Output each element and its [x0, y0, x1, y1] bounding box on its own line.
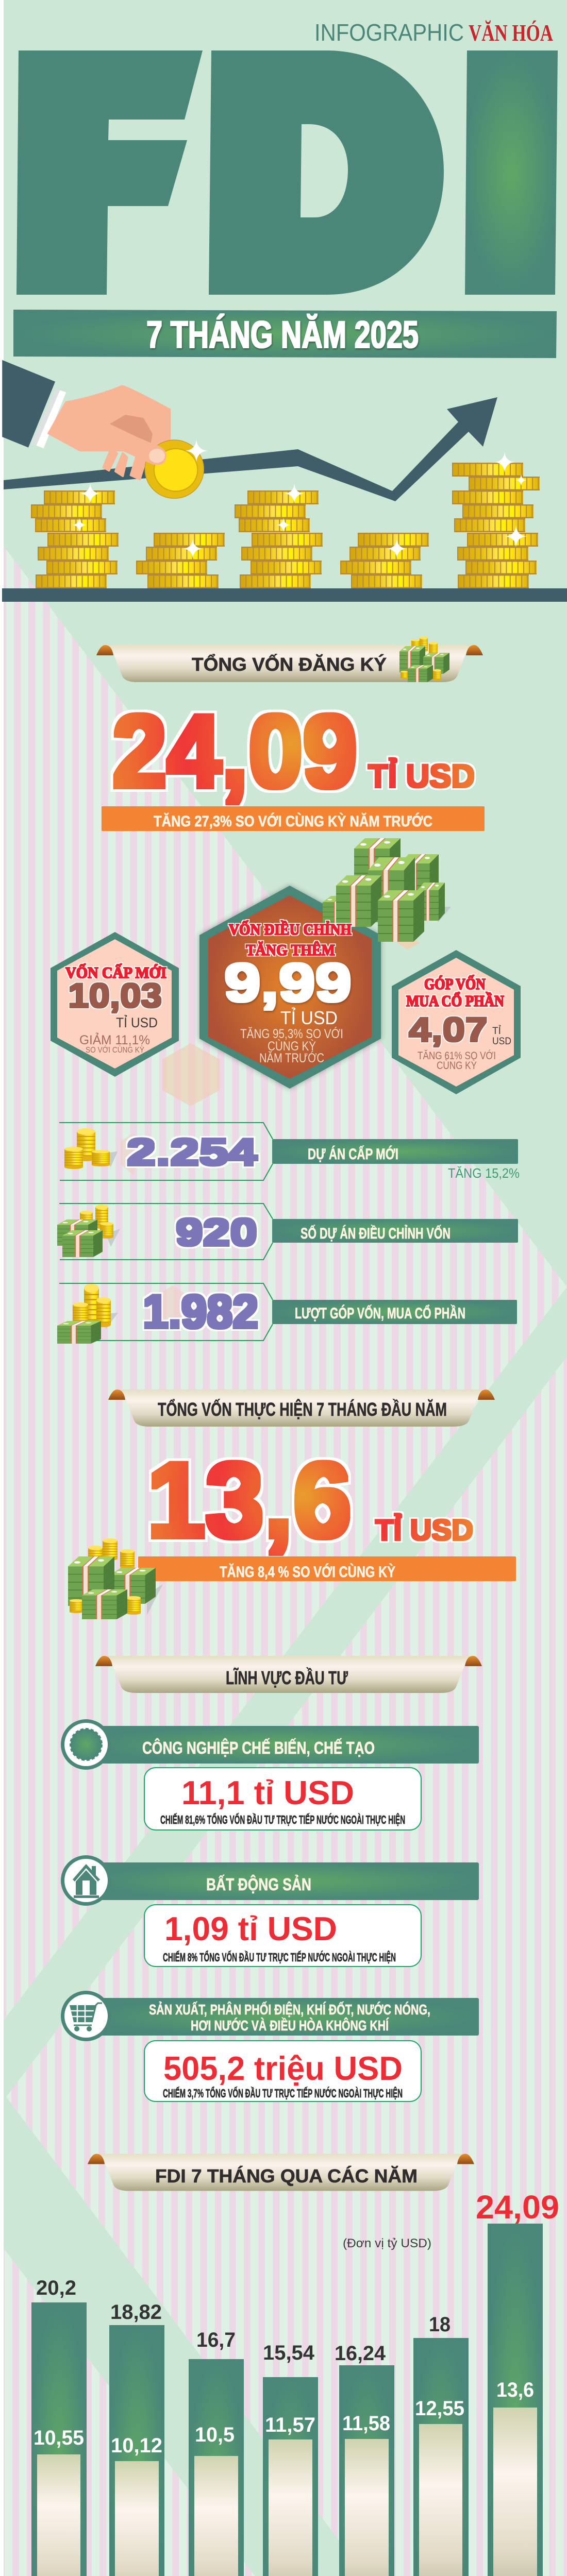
panel: electricity, gas, water: 505,2 triệu USD — [163, 2049, 403, 2087]
icon: rising arrow — [4, 397, 497, 501]
panel: real estate: CHIẾM 8% TỔNG VỐN ĐẦU TƯ TRỰC TIẾP NƯỚC NGOÀI THỰC HIỆN — [163, 1950, 396, 1964]
right hexagon: capital contribution and share purchase: USD — [492, 1036, 511, 1047]
stat row: capital contributions: 1.982 — [143, 1286, 258, 1338]
bar chart: registered and disbursed capital — [31, 2189, 559, 2576]
left hexagon: new capital: 10,03 — [68, 976, 162, 1014]
hero illustration: rising arrow, hand and coin stacks — [2, 360, 567, 602]
icon: money and coins — [399, 636, 449, 682]
panel: processing and manufacturing: CHIẾM 81,6% TỔNG VỐN ĐẦU TƯ TRỰC TIẾP NƯỚC NGOÀI THỰC HIỆN — [160, 1812, 405, 1826]
orange bar: growth 8.4% — [138, 1556, 516, 1581]
unit note: (Đơn vị tỷ USD) — [343, 2236, 431, 2250]
bars 2025: 13,6 — [496, 2379, 534, 2401]
bars 2020: 18,82 — [110, 2301, 162, 2324]
bars 2020 — [109, 2301, 164, 2576]
bars 2023: 11,58 — [342, 2412, 390, 2435]
icon: hand holding coin — [2, 360, 204, 498]
bars 2019 — [31, 2277, 87, 2576]
heading: FDI over the years: FDI 7 THÁNG QUA CÁC NĂM — [155, 2165, 418, 2187]
stat row: capital adjustment projects — [57, 1204, 518, 1260]
left hexagon: new capital: TỈ USD — [116, 1014, 158, 1030]
stat row: capital adjustment projects: 920 — [176, 1212, 257, 1253]
icon: house — [61, 1855, 111, 1906]
ground bar — [2, 588, 567, 602]
left hexagon: new capital: GIẢM 11,1% — [79, 1032, 150, 1047]
sparkles — [72, 439, 527, 558]
heading: total registered capital — [96, 636, 483, 682]
center hexagon text: adjusted capital: TỈ USD — [280, 1007, 338, 1028]
center hexagon text: adjusted capital: 9,99 — [224, 953, 352, 1013]
bars 2020: 10,12 — [111, 2434, 162, 2457]
right hexagon: capital contribution and share purchase: CÙNG KỲ — [437, 1060, 477, 1072]
center hexagon text: adjusted capital — [224, 920, 352, 1065]
bars 2022 — [263, 2342, 318, 2576]
icon: gear badge — [61, 1719, 111, 1770]
icon: money pile — [323, 838, 451, 950]
big number: 13,6 billion USD: 13,6 — [147, 1440, 352, 1560]
bars 2019: 10,55 — [34, 2427, 84, 2449]
bars 2023: 16,24 — [335, 2342, 386, 2365]
coin stack 5 — [452, 463, 540, 588]
icon: coins and bills — [57, 1284, 118, 1344]
center hexagon text: adjusted capital: TĂNG THÊM — [246, 941, 335, 959]
icon: bills and coins — [57, 1205, 120, 1257]
orange bar: growth 27.3% — [102, 806, 485, 831]
left hexagon: new capital: SO VỚI CÙNG KỲ — [86, 1045, 144, 1055]
right hexagon: capital contribution and share purchase: 4,07 — [409, 1010, 488, 1048]
stat row: capital contributions: LƯỢT GÓP VỐN, MUA CỔ PHẦN — [295, 1304, 465, 1322]
bars 2025: 24,09 — [476, 2189, 559, 2226]
panel: real estate: 1,09 tỉ USD — [164, 1910, 337, 1947]
center hexagon base — [199, 886, 381, 1089]
bars 2025 — [476, 2189, 559, 2576]
heading: total disbursed capital: TỔNG VỐN THỰC HIỆN 7 THÁNG ĐẦU NĂM — [158, 1398, 447, 1420]
heading: total disbursed capital — [108, 1389, 495, 1427]
orange bar: growth 27.3%: TĂNG 27,3% SO VỚI CÙNG KỲ NĂM TRƯỚC — [154, 812, 432, 830]
panel: electricity, gas, water: CHIẾM 3,7% TỔNG VỐN ĐẦU TƯ TRỰC TIẾP NƯỚC NGOÀI THỰC HIỆN — [163, 2086, 403, 2100]
panel: processing and manufacturing — [61, 1719, 479, 1830]
heading: FDI over the years — [88, 2154, 474, 2191]
icon: shopping cart — [61, 1991, 111, 2041]
big number: 24,09 billion USD: TỈ USD — [368, 758, 475, 794]
big number: 24,09 billion USD: 24,09 — [112, 694, 357, 809]
right hexagon: capital contribution and share purchase: GÓP VỐN — [424, 974, 486, 993]
coin stack 1 — [31, 490, 119, 588]
orange bar: growth 8.4%: TĂNG 8,4 % SO VỚI CÙNG KỲ — [220, 1563, 395, 1581]
stat row: capital adjustment projects: SỐ DỰ ÁN ĐIỀU CHỈNH VỐN — [301, 1225, 451, 1242]
icon: coin piles — [64, 1128, 118, 1169]
right hexagon: capital contribution and share purchase: MUA CỔ PHẦN — [406, 991, 504, 1010]
heading: investment sectors — [95, 1656, 482, 1693]
center hexagon text: adjusted capital: CÙNG KỲ — [268, 1039, 316, 1054]
bars 2022: 11,57 — [265, 2414, 315, 2436]
subtitle ribbon: 7 THÁNG NĂM 2025 — [146, 313, 419, 356]
left hexagon: new capital — [51, 932, 179, 1077]
center hexagon text: adjusted capital: NĂM TRƯỚC — [259, 1050, 324, 1065]
stat row: new projects: DỰ ÁN CẤP MỚI — [308, 1145, 398, 1163]
panel: real estate — [61, 1855, 479, 1967]
bars 2024 — [413, 2313, 469, 2576]
heading: investment sectors: LĨNH VỰC ĐẦU TƯ — [226, 1667, 348, 1688]
coin stack 4 — [340, 533, 429, 588]
stat row: new projects: TĂNG 15,2% — [448, 1165, 520, 1181]
big number: 13,6 billion USD: TỈ USD — [375, 1513, 473, 1547]
right hexagon: capital contribution and share purchase: TĂNG 61% SO VỚI — [418, 1050, 496, 1062]
panel: processing and manufacturing: CÔNG NGHIỆP CHẾ BIẾN, CHẾ TẠO — [142, 1738, 375, 1757]
center hexagon text: adjusted capital: TĂNG 95,3% SO VỚI — [240, 1026, 343, 1041]
bars 2021: 16,7 — [196, 2329, 236, 2351]
panel: electricity, gas, water: HƠI NƯỚC VÀ ĐIỀU HÒA KHÔNG KHÍ — [191, 2017, 389, 2033]
subtitle ribbon — [13, 310, 557, 358]
big number: 13,6 billion USD — [147, 1440, 473, 1560]
stat row: capital contributions — [57, 1283, 517, 1344]
icon: money pile with coins — [68, 1538, 163, 1619]
decorative faded hexagon — [162, 1043, 220, 1106]
bars 2023 — [335, 2342, 394, 2576]
panel: electricity, gas, water: SẢN XUẤT, PHÂN PHỐI ĐIỆN, KHÍ ĐỐT, NƯỚC NÓNG, — [149, 2001, 430, 2018]
stat row: new projects — [59, 1123, 520, 1181]
right hexagon: capital contribution and share purchase — [392, 950, 521, 1094]
bars 2019: 20,2 — [36, 2277, 76, 2299]
panel: real estate: BẤT ĐỘNG SẢN — [206, 1874, 311, 1894]
bars 2021 — [189, 2329, 244, 2576]
bars 2022: 15,54 — [263, 2342, 315, 2364]
coin stack 3 — [235, 490, 323, 588]
header brand: INFOGRAPHIC — [314, 19, 464, 46]
panel: processing and manufacturing: 11,1 tỉ USD — [181, 1774, 354, 1811]
header brand — [314, 19, 553, 46]
bars 2024: 12,55 — [415, 2397, 464, 2420]
right hexagon: capital contribution and share purchase: TỈ — [492, 1025, 501, 1037]
left hexagon: new capital: VỐN CẤP MỚI — [65, 963, 166, 981]
bars 2024: 18 — [429, 2313, 451, 2336]
coin stack 2 — [136, 533, 225, 588]
heading: total registered capital: TỔNG VỐN ĐĂNG KÝ — [192, 653, 387, 675]
center hexagon text: adjusted capital: VỐN ĐIỀU CHỈNH — [229, 920, 352, 938]
panel: electricity, gas, water — [61, 1991, 479, 2102]
bars 2021: 10,5 — [195, 2424, 235, 2446]
title: FDI letters — [16, 50, 558, 295]
stat row: new projects: 2.254 — [127, 1132, 257, 1173]
